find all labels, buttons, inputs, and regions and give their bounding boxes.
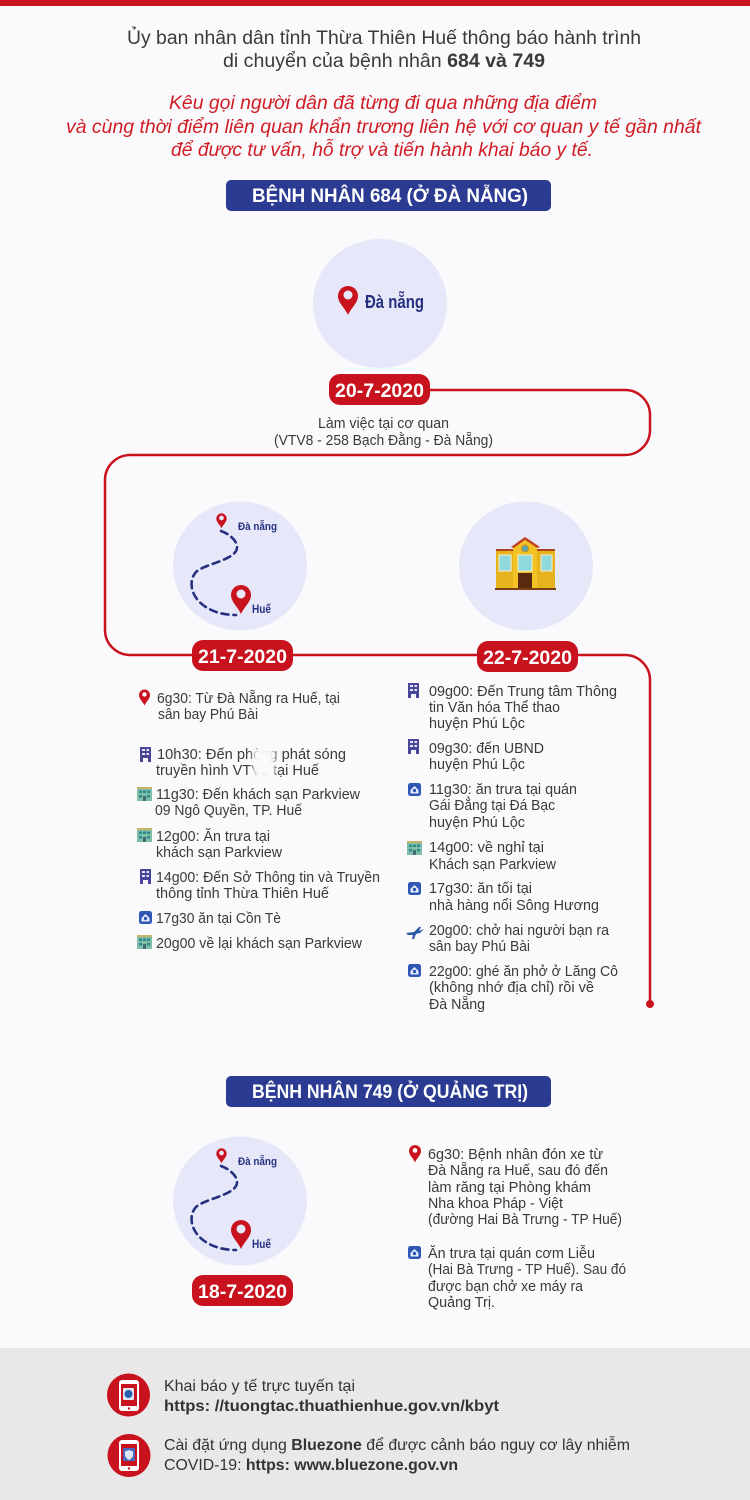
stop: 09g00: 09g00: Đến Trung tâm Thông (429, 683, 617, 700)
icon: Đà Nẵng location (313, 239, 447, 368)
heading: patient 749: BỆNH NHÂN 749 (Ở QUẢNG TRỊ) (252, 1079, 528, 1103)
stop: 22g00: 22g00: ghé ăn phở ở Lăng Cô (429, 963, 618, 980)
text: Bluezone install: COVID-19: https: www.bluezone.gov.vn (164, 1457, 458, 1474)
callout: red appeal: để được tư vấn, hỗ trợ và tiến hành khai báo y tế. (171, 140, 593, 161)
panel: footer (0, 1348, 750, 1500)
panel: 18-7 itinerary (408, 1145, 626, 1311)
stop: 20g00: 20g00: chở hai người bạn ra (429, 922, 610, 939)
stop: 10h30 (140, 746, 346, 779)
stop: lunch: Quảng Trị. (428, 1294, 495, 1311)
timeline end dot (646, 1000, 654, 1008)
stop: 17g30 (408, 880, 599, 914)
top red bar (0, 0, 750, 6)
icon: yellow office building (459, 502, 593, 630)
stop: 6g30: sân bay Phú Bài (158, 706, 258, 723)
stop: 20g00 (406, 922, 610, 955)
heading: patient 684 (226, 180, 551, 211)
stop: 6g30: 6g30: Bệnh nhân đón xe từ (428, 1146, 603, 1163)
stop: 22g00 (408, 963, 618, 1013)
stop: 14g00: thông tỉnh Thừa Thiên Huế (156, 885, 330, 902)
stop: 6g30 (409, 1145, 622, 1228)
heading: patient 684: BỆNH NHÂN 684 (Ở ĐÀ NẴNG) (252, 183, 528, 207)
stop: 14g00: Khách sạn Parkview (429, 856, 556, 873)
text: declaration link: https: //tuongtac.thuathienhue.gov.vn/kbyt (164, 1398, 500, 1415)
date: 22-7-2020 (477, 641, 578, 672)
blurred patch (253, 748, 275, 778)
stop: 09g30 (408, 739, 544, 773)
stop: 11g30: 09 Ngô Quyền, TP. Huế (155, 802, 303, 819)
stop: lunch (408, 1245, 626, 1311)
stop: 14g00 (407, 839, 556, 873)
date: 18-7-2020 (192, 1275, 293, 1306)
date: 18-7-2020: 18-7-2020 (198, 1281, 287, 1303)
stop: 10h30: truyền hình VTV8 tại Huế (156, 762, 320, 779)
stop: lunch: được bạn chở xe máy ra (428, 1278, 584, 1295)
stop: 12g00: khách sạn Parkview (156, 844, 282, 861)
stop: 14g00: 14g00: về nghỉ tại (429, 839, 544, 856)
stop: 17g30: nhà hàng nổi Sông Hương (429, 897, 599, 914)
stop: 6g30: Đà Nẵng ra Huế, sau đó đến (428, 1162, 608, 1179)
stop: 10h30: 10h30: Đến phòng phát sóng (157, 746, 346, 763)
title: Ủy ban nhân dân tỉnh Thừa Thiên Huế thông báo hành trình (127, 27, 641, 49)
stop: 09g30: huyện Phú Lộc (429, 756, 525, 773)
text: 20-7 workplace (274, 415, 493, 449)
stop: 09g00: tin Văn hóa Thể thao (429, 699, 560, 716)
stop: 14g00: 14g00: Đến Sở Thông tin và Truyền (156, 869, 380, 886)
text: declaration link (164, 1378, 500, 1415)
callout: red appeal (66, 93, 702, 161)
stop: 20g00: sân bay Phú Bài (429, 938, 530, 955)
stop: 6g30: 6g30: Từ Đà Nẵng ra Huế, tại (157, 690, 340, 707)
panel: 22-7 itinerary (406, 683, 618, 1013)
stop: 6g30: Nha khoa Pháp - Việt (428, 1195, 564, 1212)
stop: 6g30 (139, 690, 340, 723)
stop: 11g30 (408, 781, 577, 831)
stop: 20g00: 20g00 về lại khách sạn Parkview (156, 935, 362, 952)
callout: red appeal: và cùng thời điểm liên quan khẩn trương liên hệ với cơ quan y tế gần nhất (66, 117, 702, 138)
stop: 14g00 (140, 869, 380, 902)
stop: 6g30: (đường Hai Bà Trưng - TP Huế) (428, 1211, 622, 1228)
date: 20-7-2020: 20-7-2020 (335, 380, 424, 402)
stop: 11g30: huyện Phú Lộc (429, 814, 525, 831)
stop: 11g30: 11g30: ăn trưa tại quán (429, 781, 577, 798)
stop: 09g00: huyện Phú Lộc (429, 715, 525, 732)
stop: 11g30 (137, 786, 360, 819)
stop: lunch: (Hai Bà Trưng - TP Huế). Sau đó (428, 1261, 626, 1278)
text: 20-7 workplace: (VTV8 - 258 Bạch Đằng - Đà Nẵng) (274, 432, 493, 449)
date: 21-7-2020 (192, 640, 293, 671)
icon: phone declaration (107, 1374, 150, 1416)
title: di chuyển của bệnh nhân 684 và 749 (223, 51, 545, 72)
stop: 17g30: 17g30: ăn tối tại (429, 880, 532, 897)
stop: lunch: Ăn trưa tại quán cơm Liễu (428, 1245, 595, 1262)
date: 20-7-2020 (329, 374, 430, 405)
stop: 22g00: Đà Nẵng (429, 996, 485, 1013)
icon: route Đà Nẵng to Huế (173, 502, 307, 630)
timeline line (105, 390, 650, 1004)
icon: Đà Nẵng location: Đà nẵng (365, 290, 424, 312)
stop: 17g30: 17g30 ăn tại Cồn Tè (156, 910, 281, 927)
stop: 12g00: 12g00: Ăn trưa tại (156, 828, 270, 845)
stop: 22g00: (không nhớ địa chỉ) rồi về (429, 979, 594, 996)
text: declaration link: Khai báo y tế trực tuyến tại (164, 1378, 355, 1395)
title (127, 27, 641, 72)
icon: phone Bluezone (108, 1434, 150, 1477)
text: 20-7 workplace: Làm việc tại cơ quan (318, 415, 449, 432)
date: 22-7-2020: 22-7-2020 (483, 647, 572, 669)
icon: route for patient 749 (173, 1136, 307, 1266)
panel: 21-7 itinerary (137, 690, 380, 952)
stop: 09g30: 09g30: đến UBND (429, 740, 544, 757)
stop: 6g30: làm răng tại Phòng khám (428, 1179, 591, 1196)
stop: 09g00 (408, 683, 617, 732)
stop: 11g30: Gái Đẳng tại Đá Bạc (429, 796, 555, 814)
stop: 11g30: 11g30: Đến khách sạn Parkview (156, 786, 360, 803)
heading: patient 749 (226, 1076, 551, 1107)
callout: red appeal: Kêu gọi người dân đã từng đi qua những địa điểm (169, 93, 597, 114)
text: Bluezone install: Cài đặt ứng dụng Bluezone để được cảnh báo nguy cơ lây nhiễm (164, 1435, 630, 1454)
stop: 12g00 (137, 828, 282, 861)
text: Bluezone install (164, 1435, 630, 1474)
date: 21-7-2020: 21-7-2020 (198, 646, 287, 668)
